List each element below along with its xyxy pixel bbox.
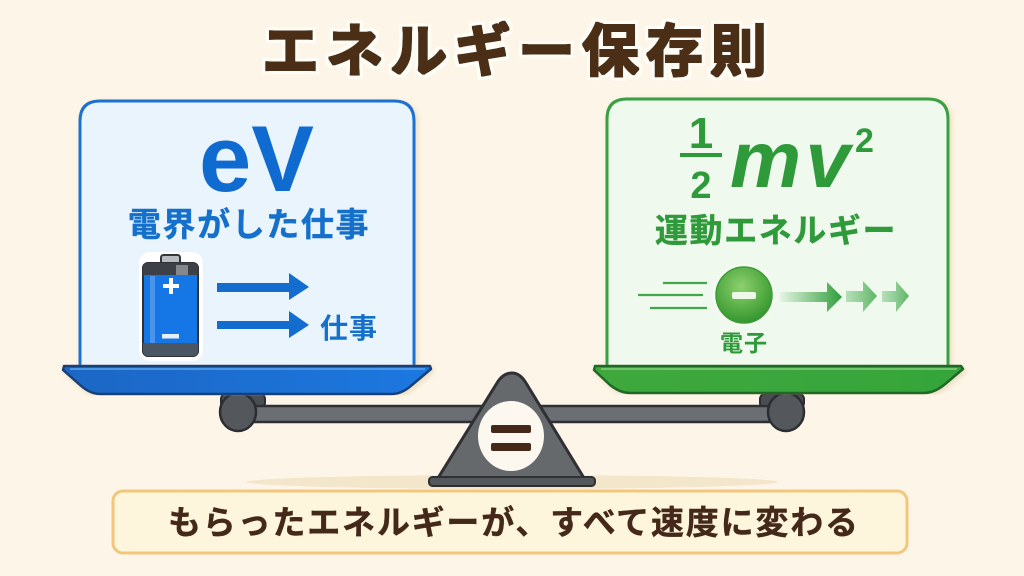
callout text: もらったエネルギーが、すべて速度に変わる bbox=[168, 504, 858, 541]
arrow: large bbox=[780, 282, 842, 312]
formula eV: eV bbox=[199, 106, 314, 211]
right pan bbox=[594, 366, 963, 393]
right board bbox=[607, 99, 948, 368]
equals bars bbox=[491, 425, 531, 451]
right hinge bbox=[768, 393, 804, 431]
panel: left eV bbox=[63, 101, 431, 394]
scale beam and hinges bbox=[220, 393, 804, 431]
arrow top bbox=[217, 273, 309, 300]
formula: one half m v squared bbox=[680, 109, 874, 207]
icon: electron bbox=[713, 264, 775, 326]
callout bbox=[113, 491, 907, 553]
panel: right kinetic energy bbox=[594, 99, 963, 393]
left pan bbox=[63, 366, 431, 394]
formula: one half m v squared: 2 bbox=[690, 165, 712, 207]
label: electron: 電子 bbox=[720, 330, 768, 356]
arrow: medium bbox=[846, 281, 877, 312]
beam bbox=[245, 406, 780, 422]
arrow bottom bbox=[217, 311, 309, 338]
right bracket bbox=[760, 394, 804, 408]
right pan highlight bbox=[601, 368, 957, 370]
left pan highlight bbox=[70, 368, 425, 370]
equals badge bbox=[478, 401, 544, 471]
arrow: small bbox=[882, 281, 909, 312]
title: エネルギー保存則 bbox=[262, 20, 774, 84]
label: work: 仕事 bbox=[320, 313, 378, 344]
left bracket bbox=[221, 394, 265, 408]
formula: one half m v squared: mv bbox=[730, 115, 854, 204]
callout box bbox=[113, 491, 907, 553]
left board bbox=[80, 101, 414, 368]
heading: electric field work: 電界がした仕事 bbox=[128, 206, 370, 243]
shadow ellipse under scale bbox=[246, 475, 778, 489]
formula: one half m v squared: 2 bbox=[855, 122, 874, 160]
heading: kinetic energy: 運動エネルギー bbox=[655, 212, 897, 249]
speed lines bbox=[638, 283, 707, 308]
fulcrum with equals sign bbox=[429, 373, 595, 486]
triangle bbox=[438, 373, 584, 478]
icon: battery bbox=[139, 252, 203, 361]
base bbox=[429, 477, 595, 486]
left hinge bbox=[220, 393, 256, 431]
formula: one half m v squared: 1 bbox=[689, 109, 713, 158]
